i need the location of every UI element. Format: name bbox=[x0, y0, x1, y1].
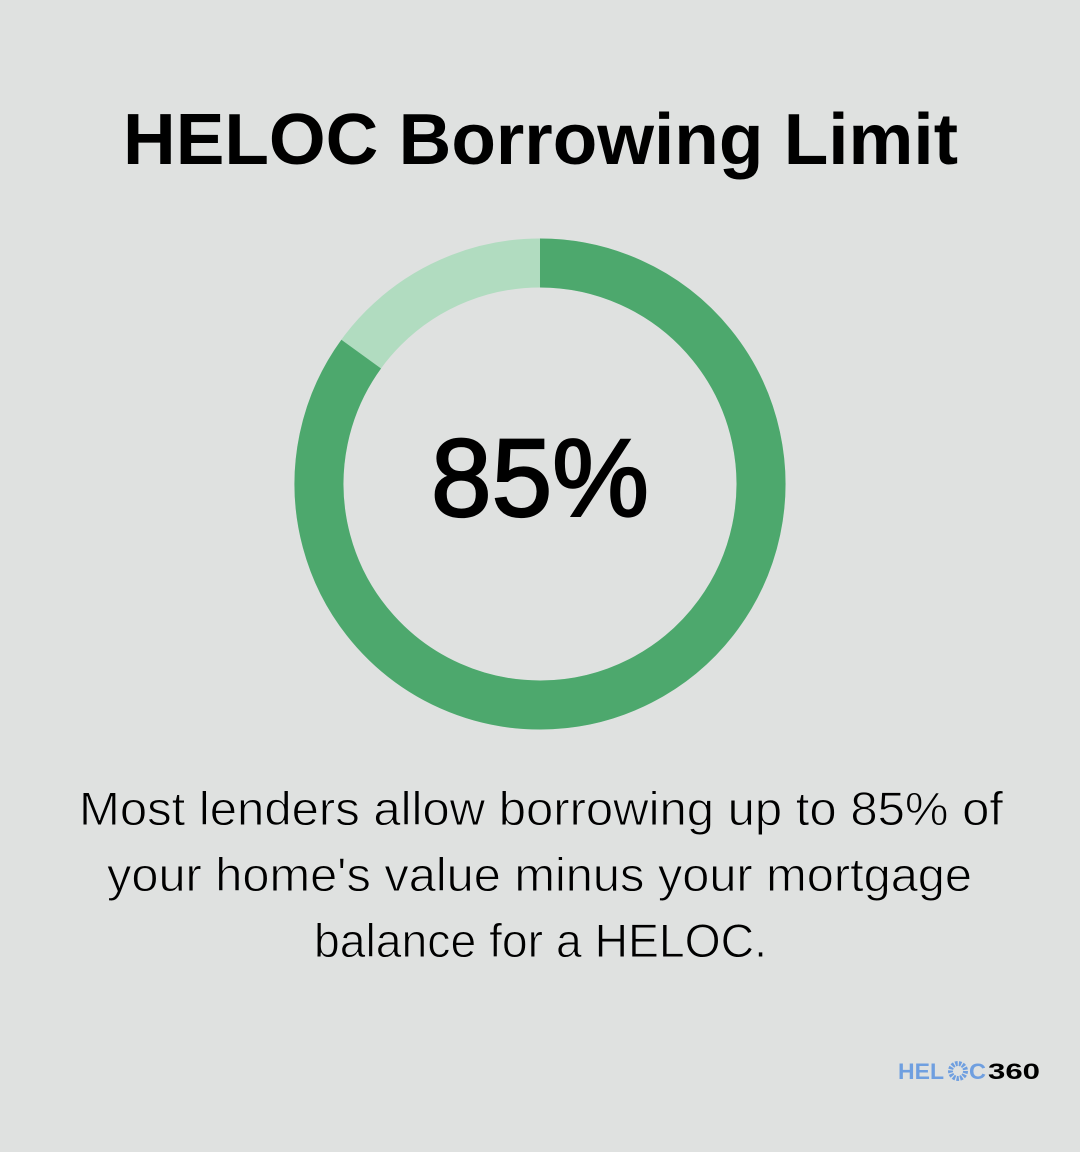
logo: HELOC360 bbox=[898, 1059, 1040, 1084]
description text bbox=[79, 782, 1004, 967]
logo: HELOC360: HEL bbox=[898, 1059, 944, 1084]
logo: HELOC360: 360 bbox=[988, 1059, 1040, 1084]
description text: balance for a HELOC. bbox=[314, 914, 767, 967]
description text: your home's value minus your mortgage bbox=[107, 848, 972, 901]
logo: HELOC360: C bbox=[969, 1059, 986, 1084]
center value: 85% bbox=[431, 417, 649, 540]
description text: Most lenders allow borrowing up to 85% of bbox=[79, 782, 1004, 835]
title: HELOC Borrowing Limit bbox=[123, 100, 958, 180]
donut chart: 85 percent bbox=[319, 263, 761, 705]
icon: logo spiral bbox=[950, 1064, 966, 1078]
